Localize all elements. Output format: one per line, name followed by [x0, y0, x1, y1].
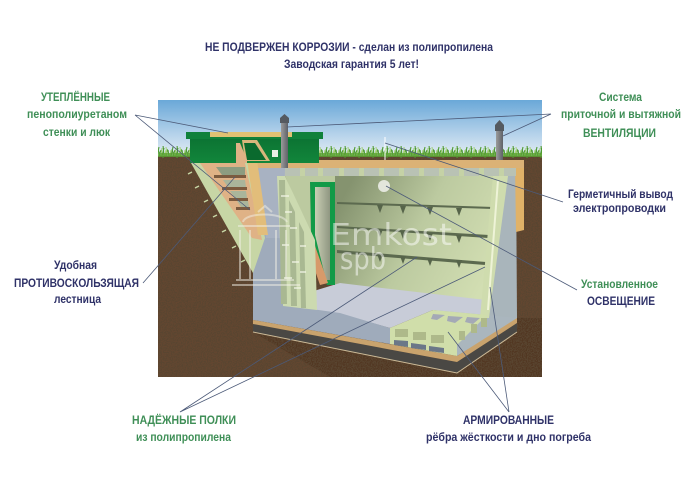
watermark	[232, 206, 452, 285]
watermark: Emkost	[330, 218, 452, 253]
label: ventilation	[561, 90, 681, 140]
gravel under floor	[253, 323, 517, 373]
ventilation pipe left	[280, 114, 289, 168]
label: wiring: электропроводки	[573, 201, 666, 215]
light fixture	[378, 180, 390, 192]
wiring mast	[384, 137, 386, 160]
floor sand layer	[253, 318, 517, 362]
stair well and steps	[188, 160, 285, 273]
right wall gray	[480, 168, 517, 325]
label: reinforced ribs: рёбра жёсткости и дно погреба	[426, 430, 591, 444]
ceiling ribs	[262, 168, 516, 176]
label: insulated walls	[27, 89, 127, 139]
label: reinforced ribs	[426, 413, 591, 444]
front floor edge	[253, 235, 390, 344]
left side wall	[285, 176, 335, 234]
left rib panel	[277, 176, 317, 310]
label: ventilation: приточной и вытяжной	[561, 107, 681, 121]
sky	[158, 100, 542, 162]
label: lighting	[581, 277, 658, 308]
grass	[158, 146, 542, 158]
ventilation pipe right	[495, 120, 504, 160]
label: shelves: НАДЁЖНЫЕ ПОЛКИ	[132, 412, 236, 427]
label: lighting: Установленное	[581, 277, 658, 291]
title: НЕ ПОДВЕРЖЕН КОРРОЗИИ - сделан из полипропилена	[205, 40, 493, 54]
right insulation wall	[515, 165, 524, 232]
label: ventilation: ВЕНТИЛЯЦИИ	[583, 126, 656, 140]
label: insulated walls: пенополиуретаном	[27, 107, 127, 121]
floor	[283, 283, 490, 328]
right rib column	[480, 176, 508, 318]
label: wiring: Герметичный вывод	[568, 187, 673, 201]
title	[205, 40, 493, 71]
label: insulated walls: УТЕПЛЁННЫЕ	[41, 89, 110, 104]
door	[308, 182, 335, 285]
leader lines	[135, 114, 577, 412]
shelves	[337, 202, 494, 268]
cellar cutaway illustration	[158, 100, 542, 377]
label: insulated walls: стенки и люк	[43, 125, 111, 139]
title: Заводская гарантия 5 лет!	[284, 57, 419, 71]
back wall	[335, 176, 495, 300]
label: lighting: ОСВЕЩЕНИЕ	[587, 294, 655, 308]
label: wiring	[568, 187, 673, 215]
soil	[158, 156, 542, 377]
label: ventilation: Система	[599, 90, 642, 104]
hatch	[186, 132, 323, 163]
ribbed floor section	[390, 310, 487, 356]
floor gray right side	[433, 310, 517, 356]
label: shelves: из полипропилена	[136, 430, 231, 444]
label: reinforced ribs: АРМИРОВАННЫЕ	[463, 413, 554, 427]
label: stairs: лестница	[54, 292, 101, 306]
label: stairs: ПРОТИВОСКОЛЬЗЯЩАЯ	[14, 276, 139, 290]
sand base line	[253, 332, 517, 373]
label: shelves	[132, 412, 236, 444]
ceiling deck	[250, 160, 524, 168]
label: stairs	[14, 258, 139, 306]
watermark: spb	[340, 242, 386, 277]
label: stairs: Удобная	[54, 258, 97, 272]
